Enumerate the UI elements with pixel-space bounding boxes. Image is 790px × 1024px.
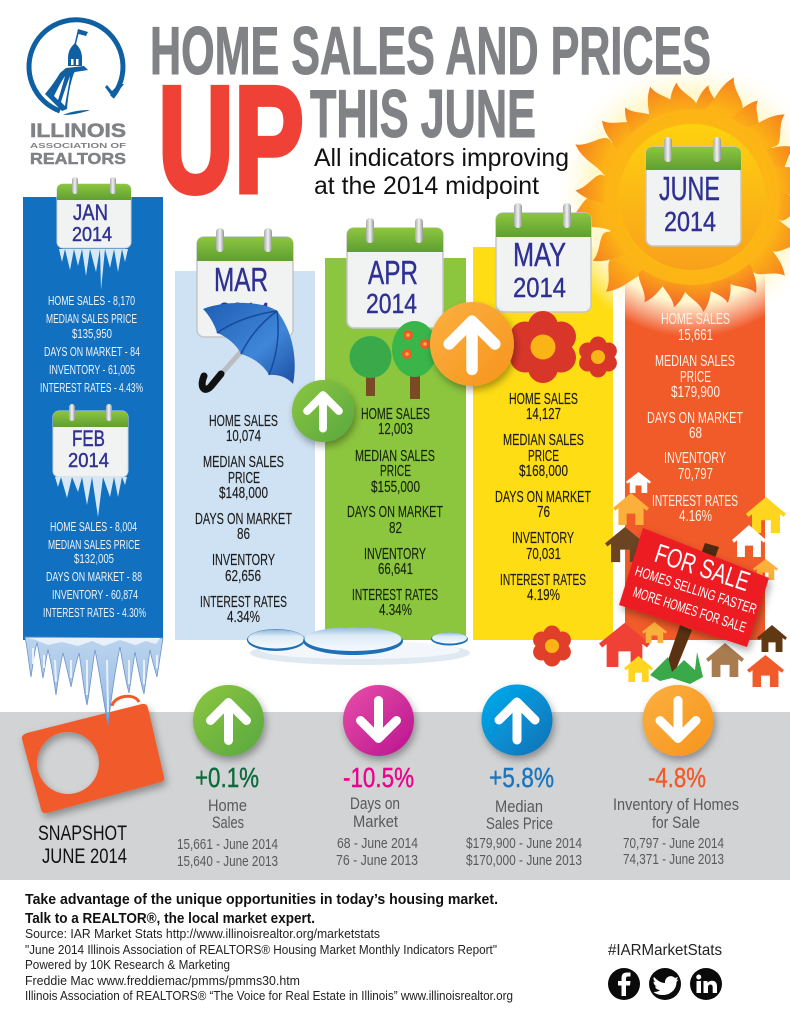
stat: days on market: -10.5% bbox=[343, 762, 414, 793]
icon: sign post and grass bbox=[650, 543, 719, 684]
text: May stats: INTEREST RATES bbox=[500, 572, 586, 589]
stat: home sales: 15,640 - June 2013 bbox=[177, 854, 278, 870]
text: May stats: 4.19% bbox=[527, 587, 560, 604]
text: January stats: DAYS ON MARKET - 84 bbox=[44, 344, 140, 359]
text: snapshot label: SNAPSHOT bbox=[38, 822, 127, 845]
calendar: June 2014: JUNE bbox=[659, 170, 720, 207]
stat: home sales: 15,661 - June 2014 bbox=[177, 837, 278, 853]
footer sources bbox=[25, 926, 513, 1003]
text: May stats: MEDIAN SALES bbox=[503, 432, 584, 449]
calendar: May 2014 bbox=[496, 203, 591, 312]
calendar: June 2014 bbox=[646, 137, 741, 246]
text: March stats: 10,074 bbox=[226, 428, 261, 445]
calendar: March 2014: 2014 bbox=[218, 297, 270, 328]
calendar: April 2014 bbox=[347, 218, 443, 328]
calendar: January 2014: JAN bbox=[73, 200, 108, 225]
panel: June bbox=[625, 270, 765, 640]
icon: facebook bbox=[608, 968, 640, 1000]
subtitle bbox=[314, 144, 569, 200]
stat: median sales price: $170,000 - June 2013 bbox=[466, 853, 582, 869]
text: April stats bbox=[347, 406, 443, 619]
subtitle: at the 2014 midpoint bbox=[314, 172, 539, 200]
text: June stats: 4.16% bbox=[679, 508, 712, 525]
icon: water puddle bbox=[247, 627, 470, 665]
icon: sun bbox=[552, 57, 790, 337]
text: January stats: $135,950 bbox=[72, 326, 112, 341]
subtitle: All indicators improving bbox=[314, 144, 569, 172]
text: April stats: DAYS ON MARKET bbox=[347, 504, 443, 521]
text: March stats bbox=[195, 413, 292, 626]
icon: large orange arrow bbox=[430, 302, 514, 386]
grey snapshot band bbox=[0, 712, 790, 880]
stat: home sales: +0.1% bbox=[195, 762, 259, 793]
text: May stats: 14,127 bbox=[526, 406, 561, 423]
stat: days on market: Days on bbox=[350, 794, 400, 813]
text: May stats: HOME SALES bbox=[509, 391, 578, 408]
text: January stats: MEDIAN SALES PRICE bbox=[46, 311, 137, 326]
stat: days on market: 76 - June 2013 bbox=[336, 853, 418, 869]
panel: May bbox=[473, 247, 613, 640]
logo: Illinois Association of Realtors: REALTORS bbox=[30, 151, 126, 168]
calendar: January 2014: 2014 bbox=[72, 224, 112, 246]
text: February stats: HOME SALES - 8,004 bbox=[50, 519, 137, 534]
text: January stats: INTEREST RATES - 4.43% bbox=[40, 380, 143, 395]
footer sources: Powered by 10K Research & Marketing bbox=[25, 957, 230, 972]
text: April stats: 12,003 bbox=[378, 421, 413, 438]
stat: days on market bbox=[336, 685, 418, 869]
stat: inventory of homes for sale: -4.8% bbox=[648, 762, 706, 793]
icicles: below January/February panel bbox=[25, 637, 163, 725]
footer sources: Freddie Mac www.freddiemac/pmms/pmms30.htm bbox=[25, 973, 300, 988]
stat: median sales price: $179,900 - June 2014 bbox=[466, 836, 582, 852]
text: snapshot label: JUNE 2014 bbox=[42, 845, 127, 868]
logo: Illinois Association of Realtors: ASSOCIATION OF bbox=[30, 141, 127, 150]
footer call to action bbox=[25, 891, 498, 927]
text: February stats: $132,005 bbox=[74, 551, 114, 566]
footer sources: Illinois Association of REALTORS® “The Voice for Real Estate in Illinois” www.illinoisrealtor.org bbox=[25, 988, 513, 1003]
title bbox=[150, 13, 711, 225]
text: April stats: 4.34% bbox=[379, 602, 412, 619]
footer call to action: Take advantage of the unique opportunities in today’s housing market. bbox=[25, 891, 498, 908]
calendar: June 2014: 2014 bbox=[664, 206, 716, 237]
text: June stats bbox=[647, 311, 743, 525]
for sale sign: FOR SALE bbox=[651, 538, 754, 597]
text: May stats: INVENTORY bbox=[512, 530, 574, 547]
title: THIS JUNE bbox=[310, 76, 536, 152]
footer sources: Source: IAR Market Stats http://www.illinoisrealtor.org/marketstats bbox=[25, 926, 380, 941]
icon: flowering tree bbox=[392, 321, 437, 399]
text: February stats: INVENTORY - 60,874 bbox=[52, 587, 138, 602]
icon: twitter bbox=[649, 968, 681, 1000]
text: March stats: DAYS ON MARKET bbox=[195, 511, 292, 528]
stat: days on market: Market bbox=[353, 812, 398, 831]
text: snapshot label bbox=[38, 822, 127, 868]
calendar: March 2014: MAR bbox=[214, 261, 268, 298]
calendar: January 2014 bbox=[57, 177, 131, 248]
icon: linkedin bbox=[690, 968, 722, 1000]
text: March stats: MEDIAN SALES bbox=[203, 454, 284, 471]
text: March stats: 62,656 bbox=[225, 568, 261, 585]
text: February stats: MEDIAN SALES PRICE bbox=[48, 537, 140, 552]
stat: inventory of homes for sale bbox=[613, 685, 739, 868]
icon: snapshot camera tag bbox=[22, 696, 164, 813]
stat: days on market: 68 - June 2014 bbox=[337, 836, 418, 852]
stat: inventory of homes for sale: Inventory of Homes bbox=[613, 795, 739, 814]
text: January stats bbox=[40, 293, 143, 395]
text: April stats: HOME SALES bbox=[361, 406, 430, 423]
text: June stats: 15,661 bbox=[678, 327, 713, 344]
calendar: February 2014: FEB bbox=[72, 426, 105, 451]
panel: January and February bbox=[23, 197, 163, 640]
stat: home sales: Sales bbox=[212, 813, 244, 832]
text: May stats: 76 bbox=[537, 504, 550, 521]
logo: Illinois Association of Realtors: ILLINOIS bbox=[30, 121, 126, 142]
icon: umbrella bbox=[202, 303, 295, 389]
panel: April bbox=[325, 258, 466, 640]
text: May stats: DAYS ON MARKET bbox=[495, 489, 591, 506]
logo: Illinois Association of Realtors bbox=[29, 20, 127, 168]
text: February stats bbox=[43, 519, 146, 620]
text: June stats: 68 bbox=[689, 425, 702, 442]
text: January stats: INVENTORY - 61,005 bbox=[49, 362, 135, 377]
text: May stats bbox=[495, 391, 591, 604]
text: April stats: INVENTORY bbox=[364, 546, 426, 563]
calendar: April 2014: APR bbox=[368, 254, 418, 291]
text: April stats: $155,000 bbox=[371, 479, 420, 496]
text: March stats: $148,000 bbox=[219, 485, 268, 502]
text: January stats: HOME SALES - 8,170 bbox=[48, 293, 135, 308]
text: April stats: MEDIAN SALES bbox=[355, 448, 435, 465]
stat: median sales price: Median bbox=[495, 797, 543, 816]
calendar: May 2014: MAY bbox=[513, 236, 566, 273]
text: March stats: PRICE bbox=[228, 470, 260, 487]
text: June stats: $179,900 bbox=[671, 384, 720, 401]
for sale sign bbox=[619, 528, 769, 647]
text: February stats: DAYS ON MARKET - 88 bbox=[46, 569, 142, 584]
calendar: February 2014: 2014 bbox=[68, 450, 109, 472]
text: June stats: HOME SALES bbox=[661, 311, 730, 328]
text: May stats: 70,031 bbox=[526, 546, 561, 563]
text: June stats: PRICE bbox=[680, 369, 711, 386]
icon: large flower bbox=[510, 311, 576, 383]
footer call to action: Talk to a REALTOR®, the local market expert. bbox=[25, 910, 315, 927]
houses around the for sale sign bbox=[599, 472, 787, 687]
stat: home sales: Home bbox=[208, 796, 247, 815]
stat: home sales bbox=[177, 685, 278, 870]
icon: bottom flower bbox=[533, 626, 571, 666]
text: March stats: INVENTORY bbox=[212, 552, 275, 569]
text: March stats: 86 bbox=[237, 526, 250, 543]
stat: median sales price: +5.8% bbox=[489, 762, 554, 793]
stat: median sales price bbox=[466, 684, 582, 869]
stat: inventory of homes for sale: for Sale bbox=[652, 813, 700, 832]
calendar: May 2014: 2014 bbox=[513, 272, 566, 303]
text: March stats: INTEREST RATES bbox=[200, 594, 287, 611]
text: April stats: 66,641 bbox=[378, 561, 413, 578]
stat: median sales price: Sales Price bbox=[486, 814, 553, 833]
calendar: March 2014 bbox=[197, 228, 293, 337]
calendar: February 2014 bbox=[53, 404, 128, 477]
text: June stats: INVENTORY bbox=[664, 450, 726, 467]
text: April stats: PRICE bbox=[380, 463, 411, 480]
text: April stats: INTEREST RATES bbox=[352, 587, 438, 604]
icon: small flower bbox=[579, 336, 617, 378]
hashtag: #IARMarketStats bbox=[608, 942, 722, 959]
text: June stats: MEDIAN SALES bbox=[655, 353, 735, 370]
text: June stats: INTEREST RATES bbox=[652, 493, 738, 510]
text: June stats: DAYS ON MARKET bbox=[647, 410, 743, 427]
stat: inventory of homes for sale: 70,797 - June 2014 bbox=[623, 836, 724, 852]
icon: round tree bbox=[350, 336, 392, 396]
text: March stats: 4.34% bbox=[227, 609, 260, 626]
calendar: April 2014: 2014 bbox=[366, 288, 417, 319]
text: April stats: 82 bbox=[389, 520, 402, 537]
icon: small green arrow bbox=[292, 380, 354, 442]
title: UP bbox=[158, 55, 304, 225]
text: March stats: HOME SALES bbox=[209, 413, 278, 430]
text: February stats: INTEREST RATES - 4.30% bbox=[43, 605, 146, 620]
icicles: below February calendar bbox=[55, 477, 127, 517]
footer sources: "June 2014 Illinois Association of REALTORS® Housing Market Monthly Indicators Report" bbox=[25, 942, 497, 957]
text: May stats: $168,000 bbox=[519, 463, 568, 480]
panel: March bbox=[175, 271, 315, 640]
text: May stats: PRICE bbox=[528, 448, 559, 465]
text: June stats: 70,797 bbox=[678, 466, 713, 483]
stat: inventory of homes for sale: 74,371 - June 2013 bbox=[623, 852, 724, 868]
icicles: below January calendar bbox=[59, 249, 128, 290]
